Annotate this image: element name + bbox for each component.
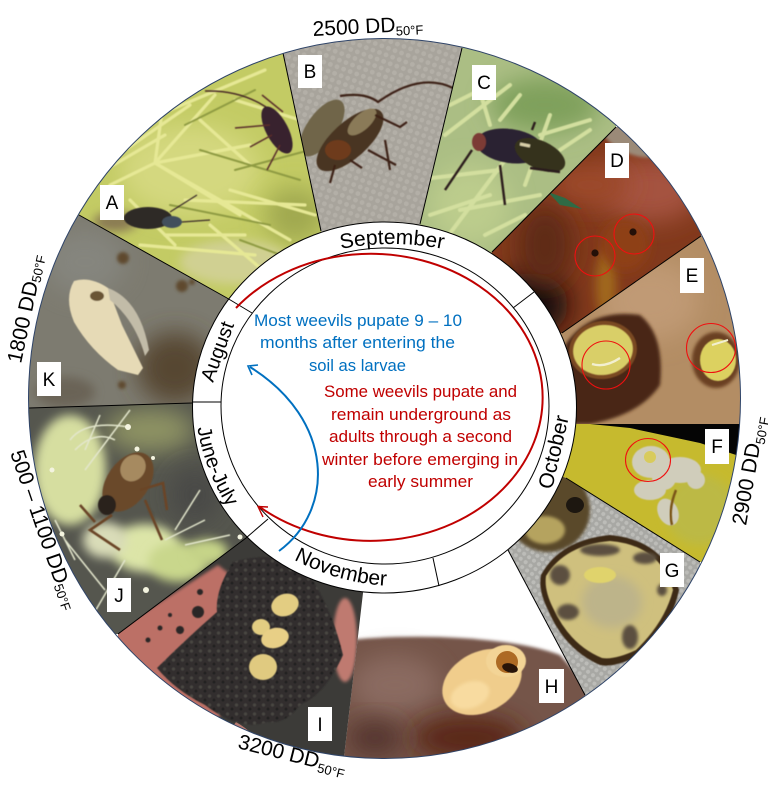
label G: G [665,561,679,582]
photo letter labels [37,55,729,741]
month ring [192,222,576,593]
label K [37,362,61,396]
month: October: October [534,413,574,491]
label E [680,258,704,293]
photo E: cut chestnuts on wood [561,236,740,424]
blue note: most weevils: Most weevils pupate 9 – 10 [254,312,462,330]
label I: I [317,715,323,736]
label I [308,707,332,741]
arrow: blue pupation arc [248,365,318,551]
degree-day label: 2900: 2900 DD [728,441,765,527]
month: June-July: June-July [198,428,237,504]
degree-day label: 1800: 1800 DD [3,279,43,365]
degree-day label: 2500: 50°F [395,22,424,39]
degree-day label: 3200: 50°F [316,760,346,782]
blue note: most weevils [254,312,462,375]
blue note: most weevils: months after entering the [260,334,455,352]
degree-day label: 500 to 1100: 500 – 1100 DD [5,447,73,587]
month: August: August [197,318,239,385]
red note: some weevils: Some weevils pupate and [324,383,517,401]
label H [539,669,564,703]
label B: B [304,62,316,83]
label J: J [114,586,124,607]
red note: some weevils [321,383,518,491]
label E: E [686,266,698,287]
photo J: weevil on chestnut catkin [29,403,246,634]
photo H: chestnut weevil larva [344,634,585,758]
leaf tip [550,193,582,209]
red note: some weevils: remain underground as [331,406,511,424]
label K: K [43,370,56,391]
blue note: most weevils: soil as larvae [309,357,406,375]
photo I: larvae in soil on a finger [118,538,363,756]
label B [298,55,322,88]
red note: some weevils: adults through a second [329,428,512,446]
month: September: September [340,230,445,250]
label J [107,578,131,612]
arrow: red two-year cycle arc [236,254,543,541]
label F: F [711,437,723,458]
degree-day label: 2500: 2500 DD [312,14,396,41]
photo D: chestnut with oviposition holes [492,127,702,334]
label D [605,143,629,178]
label H: H [545,677,558,698]
red note: some weevils: early summer [368,473,474,491]
photo K: weevil pupa [29,215,228,408]
month: November: November [295,548,387,586]
photo G: damaged chestnuts on towel [508,476,700,695]
photo C: weevil on green spines [420,48,616,253]
photo F: frass on cut nut [563,424,740,562]
label C [472,65,496,100]
label G [660,553,684,587]
label A: A [106,193,119,214]
label C: C [477,73,491,94]
red circles marking damage [575,214,736,482]
degree-day label: 3200: 3200 DD [236,731,322,773]
red note: some weevils: winter before emerging in [321,451,518,469]
degree-day label: 1800: 50°F [28,254,49,284]
label F [705,429,729,464]
label A [100,185,124,220]
wedge dividers [29,48,701,695]
degree-day label: 500 to 1100: 50°F [51,582,74,613]
photo A: weevils on burr spines [79,54,322,298]
label D: D [610,151,624,172]
photo B: mating weevils on fabric [284,39,462,232]
